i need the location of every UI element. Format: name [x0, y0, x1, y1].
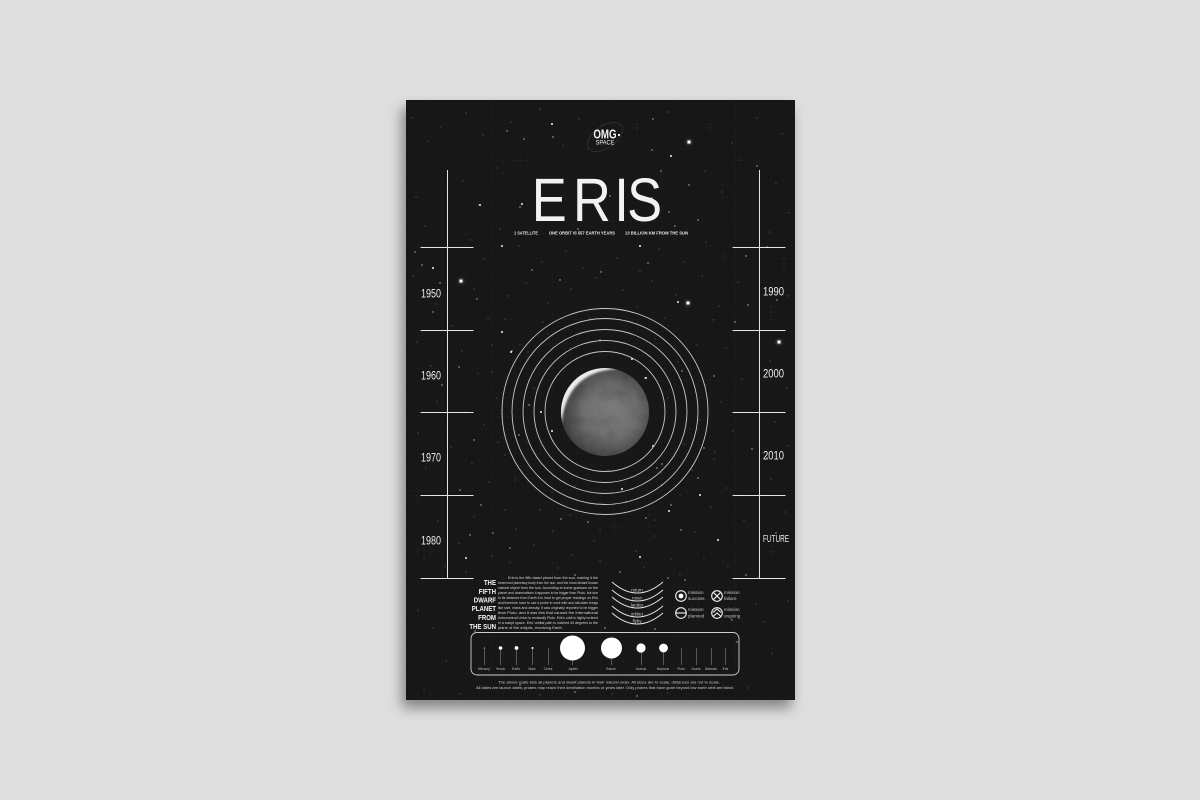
timeline: left decades: 1980 — [421, 534, 441, 548]
description text: Eris is the fifth dwarf planet from the sun, making it the — [508, 576, 598, 580]
planet names: Mercury — [478, 667, 490, 671]
title: ERIS — [532, 166, 662, 235]
planet names: Mars — [528, 667, 536, 671]
heading: the fifth dwarf planet from the sun: THE SUN — [469, 623, 496, 631]
timeline: left decades: 1950 — [421, 286, 441, 300]
icon: mission success — [676, 591, 686, 601]
planet names: Earth — [512, 667, 520, 671]
logo: OMG Space — [582, 117, 628, 157]
planet names: Pluto — [677, 667, 685, 671]
legend labels: mission — [724, 607, 740, 612]
description text: and therefore have to use a probe to work with and calculate things — [498, 601, 598, 605]
subtitle facts: ONE ORBIT IS 557 EARTH YEARS — [549, 230, 615, 236]
footnote — [476, 680, 734, 690]
subtitle facts — [514, 230, 689, 236]
legend labels: mission — [688, 607, 704, 612]
legend: mission types arcs: flyby — [632, 618, 642, 624]
timeline: right decades — [732, 170, 789, 578]
heading: the fifth dwarf planet from the sun: FROM — [478, 614, 496, 622]
description text: in a swept space. Eris' orbital path is inclined 44 degrees to the — [498, 621, 598, 625]
timeline: right decades: 2010 — [763, 448, 784, 462]
icon: mission planned — [676, 608, 686, 618]
poster background — [406, 100, 795, 700]
bright square stars — [458, 139, 782, 345]
legend labels: planned — [688, 614, 705, 618]
heading: the fifth dwarf planet from the sun: DWARF — [474, 597, 496, 605]
timeline: left decades: 1960 — [421, 368, 441, 382]
legend labels — [688, 590, 741, 618]
heading: the fifth dwarf planet from the sun: PLANET — [472, 605, 497, 613]
planet names: Neptune — [657, 667, 669, 671]
subtitle facts: 1 SATELLITE — [514, 230, 538, 236]
timeline: right decades: 1990 — [763, 284, 784, 298]
star field — [412, 109, 789, 696]
footnote: All dates are launch dates; probes may reach their destination months or years later. Only probes that have gone beyond low earth orbit are listed. — [476, 685, 734, 690]
description text: planet and observations it appears to be bigger than Pluto, but due — [498, 591, 598, 595]
planet Eris — [561, 368, 649, 456]
timeline: left decades — [420, 170, 474, 578]
description text: natural object from the sun. According to some guesses on the — [498, 586, 598, 590]
legend labels: failure — [724, 596, 737, 601]
description text: to its distance from Earth it is hard to get proper readings on Eris — [498, 596, 598, 600]
description text: than Pluto, and it was this that caused the International — [498, 611, 598, 615]
heading: the fifth dwarf planet from the sun — [469, 579, 497, 631]
icon: mission failure — [712, 591, 722, 601]
legend labels: success — [688, 596, 705, 601]
timeline: right decades: FUTURE — [763, 534, 789, 545]
timeline: left decades: 1970 — [421, 450, 441, 464]
planet names: Saturn — [606, 667, 616, 671]
planet names: Haumea — [692, 667, 701, 671]
description text: plane of the ecliptic, revolving Earth. — [498, 626, 563, 630]
legend: mission types arcs: rover — [632, 596, 643, 600]
planet names: Ceres — [544, 667, 553, 671]
legend labels: mission — [688, 590, 704, 595]
footnote: The above scale lists all planets and dwarf planets in their natural order. All sizes are to scale, distances are not to scale. — [498, 680, 720, 684]
legend: mission types arcs: lander — [631, 602, 644, 608]
heading: the fifth dwarf planet from the sun: THE — [484, 579, 496, 587]
planet names: Makemake — [705, 667, 717, 671]
planet discs — [484, 636, 668, 660]
description text: innermost planetary body from the sun, and the most distant known — [498, 581, 598, 585]
timeline: right decades: 2000 — [763, 366, 784, 380]
solar system scale panel — [471, 632, 739, 675]
subtitle facts: 13 BILLION KM FROM THE SUN — [625, 230, 689, 236]
orbit rings — [502, 308, 708, 514]
legend: mission status icons — [676, 590, 741, 618]
legend labels: ongoing — [724, 614, 741, 618]
planet names: Uranus — [636, 667, 647, 671]
legend: mission types arcs — [612, 582, 663, 624]
legend: mission types arcs: return — [631, 588, 643, 592]
heading: the fifth dwarf planet from the sun: FIFTH — [479, 588, 496, 596]
planet names: Jupiter — [568, 667, 579, 671]
description text: Astronomical Union to reclassify Pluto. Eris's orbit is highly inclined — [498, 616, 598, 620]
description text: like size, mass and density. It was originally reported to be bigger — [498, 606, 599, 610]
legend: mission types arcs: orbiter — [631, 612, 644, 616]
legend labels: mission — [724, 590, 740, 595]
planet names: Venus — [496, 667, 505, 671]
description text — [498, 576, 599, 630]
logo: OMG Space: OMG — [593, 128, 617, 142]
icon: mission ongoing — [712, 608, 722, 618]
planet names: Eris — [723, 667, 729, 671]
planet stems — [484, 648, 726, 665]
logo: OMG Space: SPACE — [596, 140, 614, 147]
poster artwork — [411, 108, 790, 697]
planet names — [478, 667, 729, 671]
